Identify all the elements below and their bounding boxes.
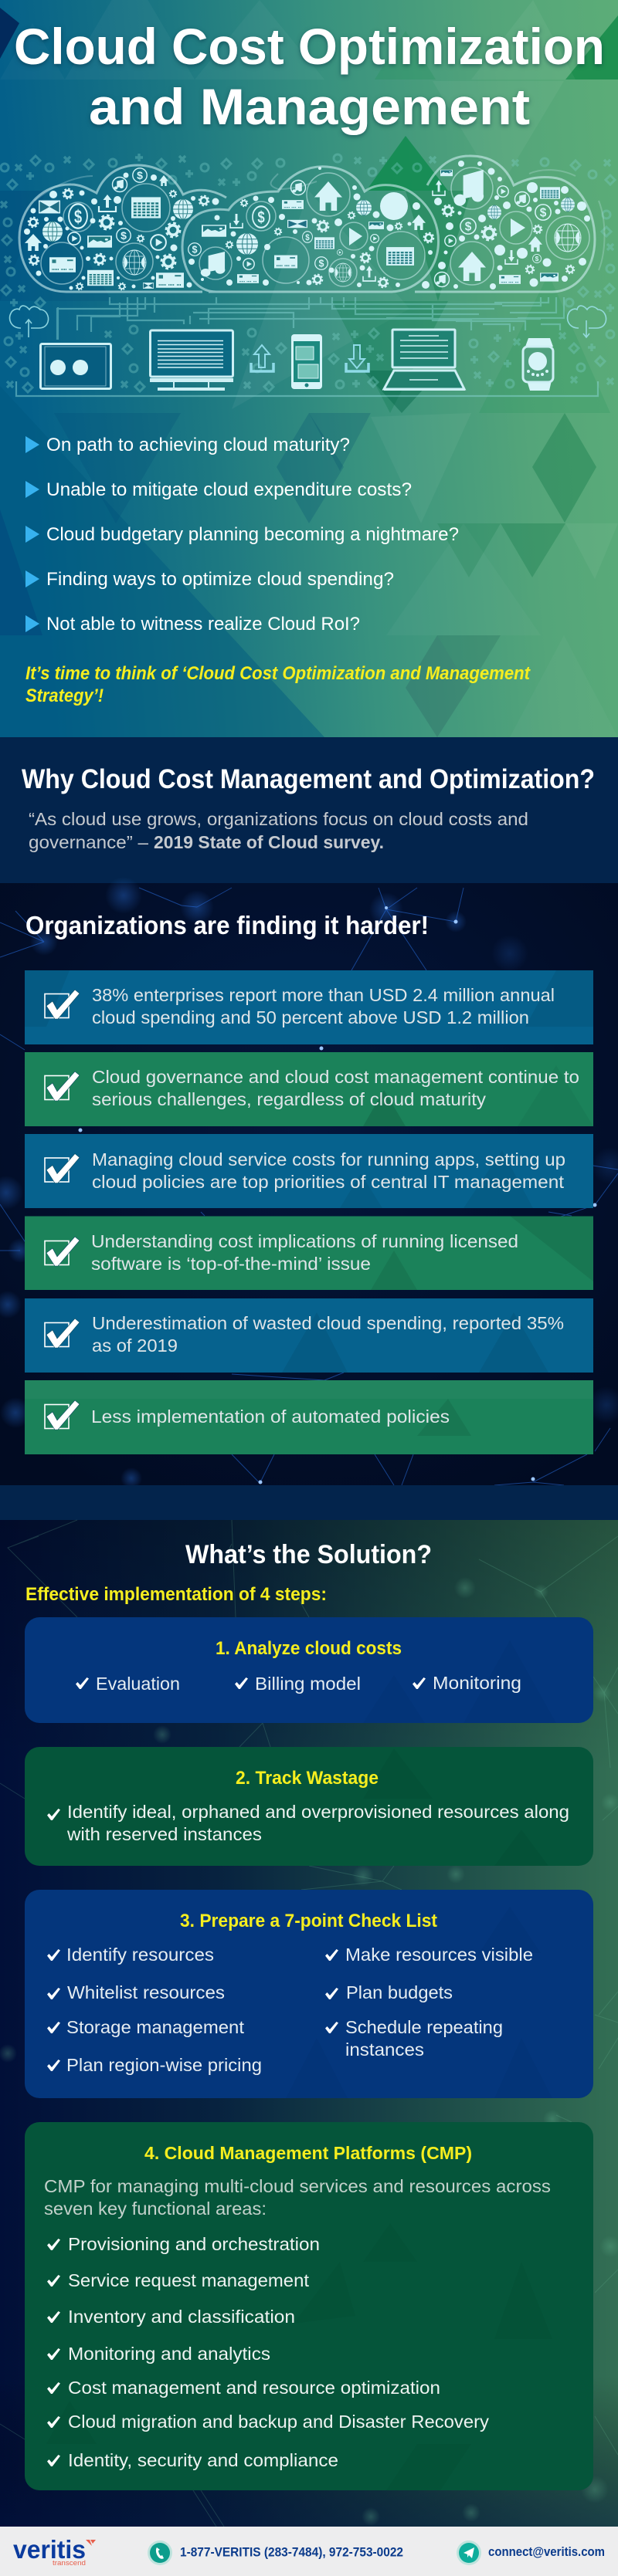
item: identify [47, 1802, 569, 1844]
panel: finding 1: cloud spending and 50 percent above USD 1.2 million [92, 1007, 529, 1027]
intro text: seven key functional areas: [44, 2199, 267, 2219]
logo: veritis [13, 2535, 86, 2564]
icon: cloud download [568, 306, 606, 337]
panel: finding 2 [25, 1052, 593, 1126]
checklist: Inventory and classification [68, 2307, 295, 2327]
question 2: Unable to mitigate cloud expenditure costs? [46, 479, 412, 500]
footer [0, 2527, 618, 2576]
item: identify: Identify ideal, orphaned and overprovisioned resources along [67, 1802, 569, 1822]
icon: laptop [384, 330, 465, 391]
icon: phone [148, 2540, 172, 2565]
checklist: Plan region-wise pricing [66, 2055, 262, 2075]
icon: smart watch [523, 338, 553, 391]
panel: finding 2: serious challenges, regardless of cloud maturity [92, 1089, 487, 1109]
icon: phone [291, 334, 322, 389]
panel: finding 2: Cloud governance and cloud cost management continue to [92, 1067, 579, 1087]
list: questions [25, 435, 459, 635]
cloud outlines [19, 156, 604, 292]
logo: transcend [53, 2559, 86, 2568]
checklist [47, 1945, 533, 2075]
item: identify: with reserved instances [66, 1824, 262, 1844]
cloud 1 icons [39, 201, 60, 213]
checklist: Schedule repeating [345, 2017, 503, 2037]
panel: solution background [0, 1520, 618, 2527]
callout: strategy [25, 663, 531, 706]
heading: organizations: Organizations are finding it harder! [25, 911, 429, 939]
icon: cloud upload [10, 306, 49, 337]
illustration: circuit lines [16, 297, 598, 396]
panel: finding 3 [25, 1134, 593, 1208]
cloud 2 icons [202, 225, 226, 237]
question 1: On path to achieving cloud maturity? [46, 435, 350, 455]
checklist: Whitelist resources [67, 1982, 225, 2002]
panel: finding 5: Underestimation of wasted cloud spending, reported 35% [92, 1313, 564, 1333]
panel: finding 4 [25, 1216, 593, 1290]
checklist: Monitoring and analytics [68, 2344, 270, 2364]
checklist: Plan budgets [346, 1982, 453, 2002]
dots [24, 161, 590, 290]
background symbols pattern [1, 154, 615, 392]
panel: finding 6: Less implementation of automated policies [91, 1406, 450, 1427]
checklist: Make resources visible [345, 1945, 533, 1965]
quote: “As cloud use grows, organizations focus on cloud costs and [29, 809, 528, 829]
quote: governance” – [29, 832, 148, 852]
panel: step 2: 2. Track Wastage [236, 1768, 379, 1789]
quote: 2019 State of Cloud survey. [154, 832, 384, 852]
icon: monitor [150, 330, 233, 391]
panel: step 4 [25, 2122, 593, 2490]
cloud 3 icons [440, 170, 453, 176]
intro text: CMP for managing multi-cloud services and resources across [44, 2176, 551, 2196]
icon: download arrow [346, 345, 368, 371]
panel: finding 4: software is ‘top-of-the-mind’ issue [91, 1254, 371, 1274]
phone number: 1-877-VERITIS (283-7484), 972-753-0022 [180, 2546, 403, 2560]
intro text [44, 2176, 551, 2219]
panel: finding 1: 38% enterprises report more than USD 2.4 million annual [92, 985, 555, 1005]
item: evaluation: Evaluation [96, 1674, 180, 1694]
panel: finding 5 [25, 1298, 593, 1373]
item: monitoring: Monitoring [433, 1673, 521, 1693]
panel: why band [0, 737, 618, 883]
checklist: Provisioning and orchestration [68, 2234, 320, 2254]
checklist: instances [345, 2039, 424, 2060]
checklist: Cloud migration and backup and Disaster Recovery [68, 2412, 490, 2432]
checklist [47, 2234, 490, 2470]
icon: tablet [40, 344, 111, 389]
callout: strategy: Strategy’! [25, 685, 104, 706]
panel: finding 1 [25, 970, 593, 1044]
panel: step 3 [25, 1890, 593, 2098]
question 5: Not able to witness realize Cloud RoI? [46, 614, 360, 635]
panel: finding 4: Understanding cost implications of running licensed [91, 1231, 518, 1251]
divider band [0, 1485, 618, 1520]
panel: finding 3: Managing cloud service costs for running apps, setting up [92, 1149, 565, 1170]
panel: finding 5: as of 2019 [92, 1335, 178, 1356]
checklist: Identify resources [66, 1945, 214, 1965]
checklist: Service request management [68, 2270, 310, 2290]
title: and Management [89, 78, 530, 135]
panel: step 2 [25, 1747, 593, 1866]
question 4: Finding ways to optimize cloud spending? [46, 569, 394, 590]
item: billing model: Billing model [255, 1674, 361, 1694]
checklist: Identity, security and compliance [68, 2450, 338, 2470]
checklist: Storage management [66, 2017, 245, 2037]
panel: finding 3: cloud policies are top priorities of central IT management [92, 1172, 565, 1192]
title: Cloud Cost Optimization [14, 18, 605, 75]
panel: step 1 [25, 1617, 593, 1723]
email address: connect@veritis.com [488, 2545, 605, 2559]
panel: step 4: 4. Cloud Management Platforms (CMP) [144, 2143, 472, 2163]
panel: hero background [0, 0, 618, 737]
icon: upload arrow [251, 345, 273, 371]
title [14, 18, 605, 135]
callout: strategy: It’s time to think of ‘Cloud Cost Optimization and Management [25, 663, 531, 684]
panel: step 1: 1. Analyze cloud costs [216, 1638, 402, 1659]
illustration: three clouds of icons [19, 156, 604, 292]
icon: email [457, 2540, 481, 2565]
panel: finding 6 [25, 1380, 593, 1454]
panel: step 3: 3. Prepare a 7-point Check List [180, 1911, 437, 1931]
rings [41, 168, 589, 286]
panel: network background [0, 877, 618, 1489]
subheading: steps: Effective implementation of 4 steps: [25, 1584, 327, 1605]
quote [29, 809, 528, 852]
checklist: Cost management and resource optimization [68, 2378, 440, 2398]
heading: solution: What’s the Solution? [185, 1540, 432, 1569]
question 3: Cloud budgetary planning becoming a nightmare? [46, 524, 459, 545]
